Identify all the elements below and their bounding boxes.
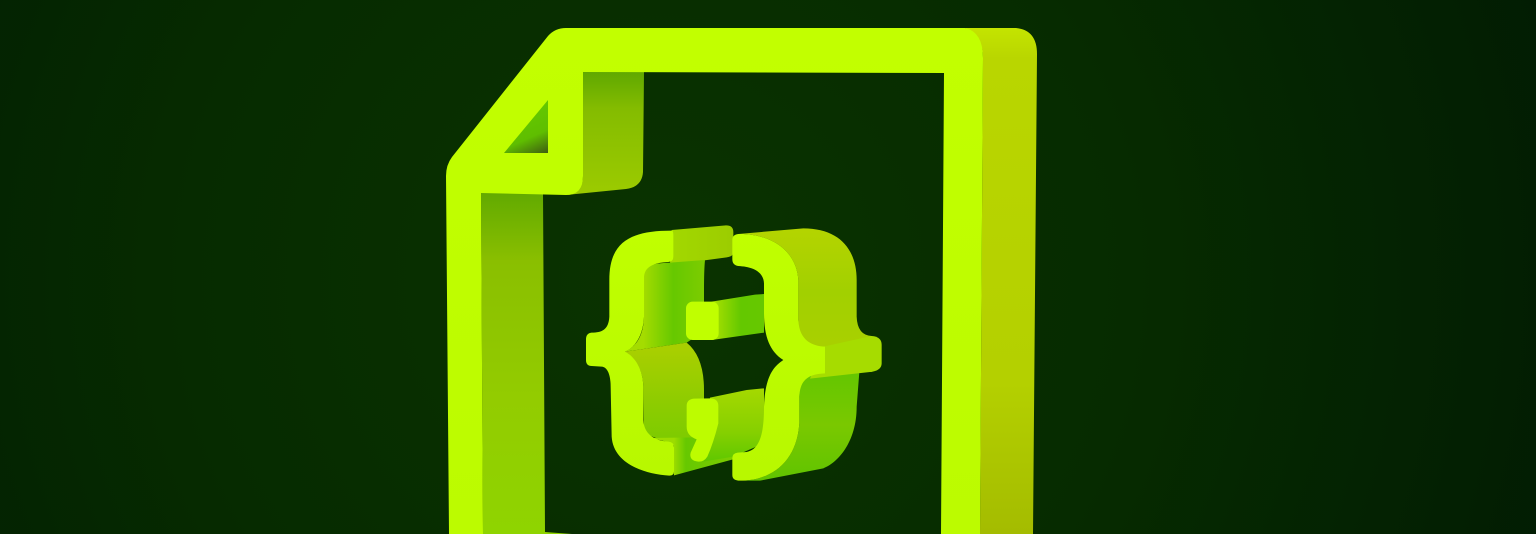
left brace depth faces — [625, 225, 737, 475]
document left inner side face — [481, 193, 572, 534]
icon: document — [446, 28, 1037, 534]
document right side face — [965, 28, 1037, 534]
icon: curly braces with colon-like marks — [586, 225, 882, 481]
comma front — [687, 398, 718, 462]
comma depth face — [703, 388, 764, 462]
fold triangle opening — [504, 100, 548, 153]
folded corner side face — [566, 72, 644, 195]
right brace front — [732, 234, 825, 481]
dot front — [686, 302, 719, 340]
document front outline — [446, 28, 983, 534]
dot depth face — [712, 294, 764, 340]
left brace front — [586, 231, 674, 476]
right brace depth faces — [738, 228, 882, 481]
